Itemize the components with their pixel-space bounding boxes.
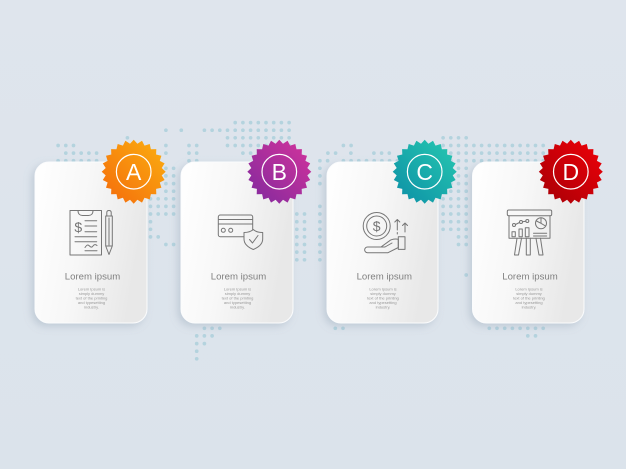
card B [181, 162, 293, 323]
badge B: B [272, 159, 287, 185]
heading B: Lorem ipsum [211, 271, 266, 282]
badge A [102, 140, 166, 204]
icon: invoice and pen: $ [74, 219, 82, 235]
text block C: Lorem Ipsum is [369, 286, 397, 292]
text block D: text of the printing [513, 296, 545, 300]
badge C: C [416, 159, 433, 185]
icon: coin in hand with arrows [363, 212, 408, 253]
text block B: simply dummy [225, 291, 250, 296]
text block D [513, 286, 545, 310]
text block A: industry. [84, 304, 99, 310]
heading C: Lorem ipsum [357, 271, 412, 282]
text block D: simply dummy [516, 291, 542, 296]
text block B: and typesetting [224, 300, 251, 305]
dotted world map [58, 123, 550, 359]
text block C: text of the printing [367, 296, 399, 300]
heading A: Lorem ipsum [65, 271, 120, 282]
panel: C [327, 162, 438, 323]
text block B: industry. [230, 304, 245, 310]
text block D: Lorem Ipsum is [515, 286, 543, 292]
panel: A [35, 162, 147, 323]
icon: coin in hand with arrows: $ [373, 218, 381, 234]
badge A: A [126, 159, 142, 185]
panel: B [181, 162, 293, 323]
badge D: D [562, 159, 579, 185]
text block A [76, 286, 107, 310]
text block B [222, 286, 253, 310]
heading D: Lorem ipsum [502, 271, 558, 282]
icon: credit card and shield [218, 215, 263, 250]
card D [472, 162, 584, 323]
text block A: and typesetting [78, 300, 105, 305]
badge B [247, 140, 311, 204]
badge D [539, 140, 603, 204]
card A [35, 162, 147, 323]
panel: D [472, 162, 584, 323]
text block C: and typesetting [369, 300, 397, 305]
text block D: industry. [522, 304, 536, 310]
text block B: text of the printing [222, 296, 253, 300]
icon: invoice and pen [70, 210, 112, 255]
text block B: Lorem Ipsum is [224, 286, 251, 292]
text block A: Lorem Ipsum is [78, 286, 105, 292]
badge C [393, 140, 457, 204]
text block D: and typesetting [515, 300, 543, 305]
icon: presentation board [507, 210, 552, 255]
text block A: simply dummy [79, 291, 104, 296]
card C [327, 162, 438, 323]
text block C [367, 286, 399, 310]
text block C: simply dummy [370, 291, 396, 296]
text block C: industry. [376, 304, 390, 310]
text block A: text of the printing [76, 296, 107, 300]
